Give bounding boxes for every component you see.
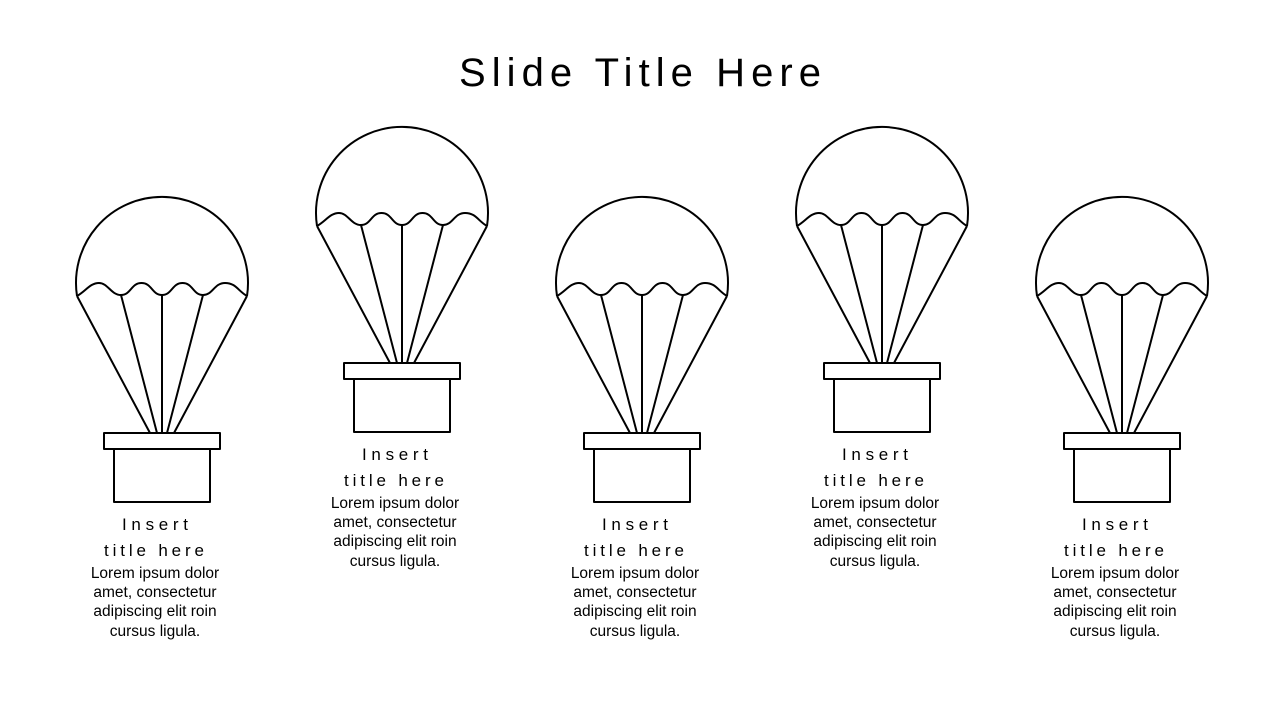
balloon 5: title here: [1064, 541, 1164, 560]
balloon 2: cursus ligula.: [350, 553, 440, 570]
balloon 5: cursus ligula.: [1070, 623, 1160, 640]
balloon 2: title here: [344, 471, 444, 490]
balloon 4: adipiscing elit roin: [813, 533, 937, 550]
balloon 1: cursus ligula.: [110, 623, 200, 640]
balloon 2: Lorem ipsum dolor: [331, 495, 459, 512]
balloon 4: cursus ligula.: [830, 553, 920, 570]
balloon 4: amet, consectetur: [813, 514, 937, 531]
balloon 5: amet, consectetur: [1053, 584, 1177, 601]
balloon 5: Insert: [1082, 515, 1148, 534]
balloon 1: [76, 197, 248, 640]
balloon 3: amet, consectetur: [573, 584, 697, 601]
balloon 3: adipiscing elit roin: [573, 603, 697, 620]
balloon 4: Insert: [842, 445, 908, 464]
balloon 5: [1036, 197, 1208, 640]
balloon 3: title here: [584, 541, 684, 560]
balloon 2: amet, consectetur: [333, 514, 457, 531]
balloon 1: amet, consectetur: [93, 584, 217, 601]
balloon 1: title here: [104, 541, 204, 560]
balloon 5: adipiscing elit roin: [1053, 603, 1177, 620]
balloon 4: Lorem ipsum dolor: [811, 495, 939, 512]
balloon 3: [556, 197, 728, 640]
balloon 4: [796, 127, 968, 570]
title: Slide Title Here: [459, 51, 821, 95]
balloon 3: Lorem ipsum dolor: [571, 565, 699, 582]
balloon 2: adipiscing elit roin: [333, 533, 457, 550]
balloon 1: adipiscing elit roin: [93, 603, 217, 620]
balloon 1: Lorem ipsum dolor: [91, 565, 219, 582]
balloon 2: Insert: [362, 445, 428, 464]
balloon 4: title here: [824, 471, 924, 490]
balloon 3: Insert: [602, 515, 668, 534]
balloon 5: Lorem ipsum dolor: [1051, 565, 1179, 582]
balloon 1: Insert: [122, 515, 188, 534]
balloon 2: [316, 127, 488, 570]
balloon 3: cursus ligula.: [590, 623, 680, 640]
